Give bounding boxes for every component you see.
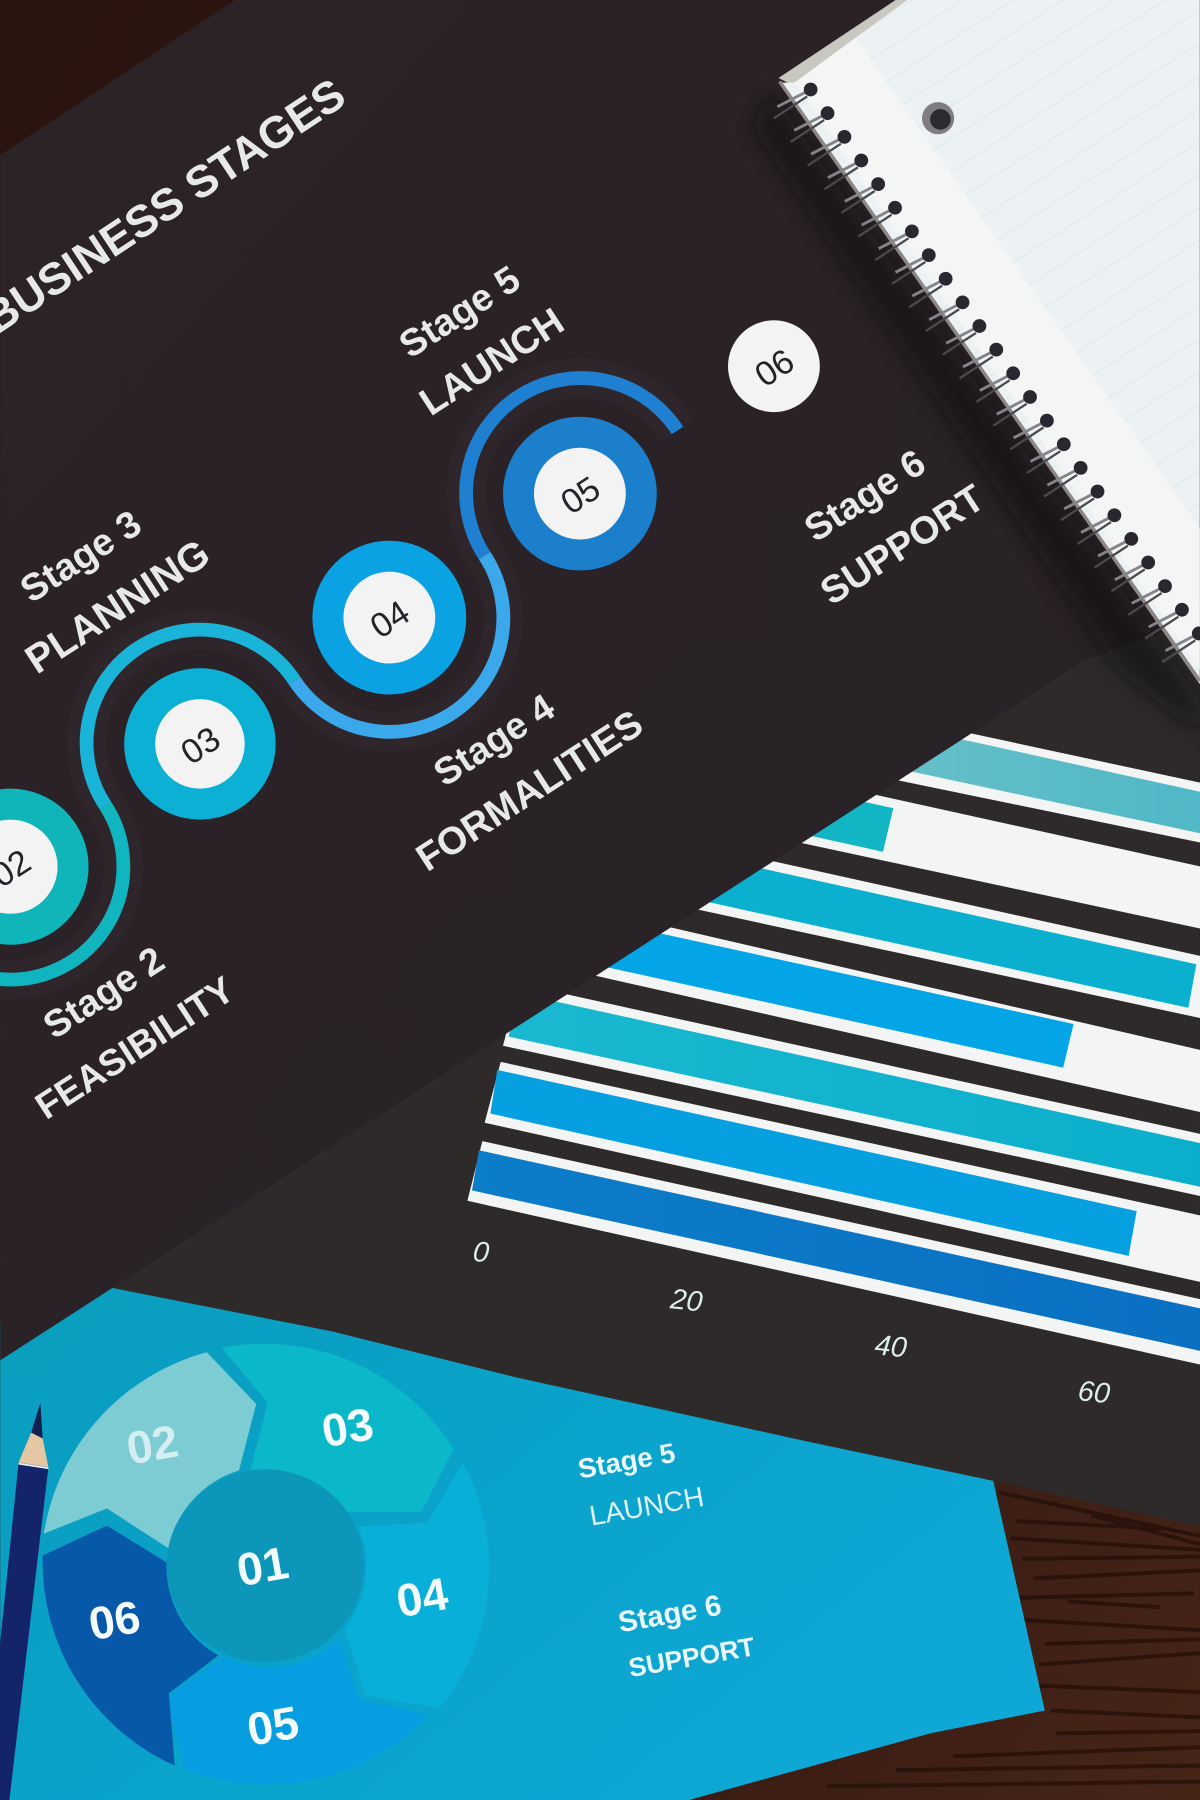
label stage 5 bbox=[392, 258, 572, 424]
axis labels: 60 bbox=[1076, 1375, 1112, 1410]
stage circle 03: 03 bbox=[174, 720, 227, 772]
label stage 5: LAUNCH bbox=[412, 300, 572, 424]
stage 6 label: Stage 6 bbox=[616, 1590, 724, 1639]
label stage 4: Stage 4 bbox=[426, 686, 562, 795]
label stage 3: Stage 3 bbox=[13, 503, 149, 611]
donut numbers: 02 bbox=[123, 1414, 182, 1474]
donut chart bbox=[43, 1344, 489, 1785]
donut numbers: 03 bbox=[318, 1397, 377, 1457]
segment 02 bbox=[44, 1352, 256, 1549]
stage circle 06 bbox=[728, 320, 820, 412]
label stage 3: PLANNING bbox=[17, 531, 218, 683]
timeline path bbox=[0, 378, 677, 980]
bar row 6 bbox=[554, 728, 1200, 932]
bar row 5 bbox=[536, 813, 1200, 1022]
label stage 2: FEASIBILITY bbox=[28, 968, 242, 1127]
bar chart bbox=[467, 647, 1200, 1368]
panel: dark bar chart sheet bbox=[0, 574, 1200, 1527]
segment 04 bbox=[345, 1462, 489, 1708]
panel: black timeline sheet bbox=[0, 0, 1200, 1360]
stage 6 label bbox=[616, 1590, 757, 1683]
stage 5 label: Stage 5 bbox=[576, 1437, 677, 1484]
panel: spiral notebook bbox=[752, 0, 1200, 735]
label stage 5: Stage 5 bbox=[392, 258, 528, 367]
stage circle 02 bbox=[0, 789, 89, 945]
stage 5 label: LAUNCH bbox=[587, 1481, 706, 1532]
segment 01 center bbox=[167, 1469, 364, 1662]
bar row 4 bbox=[519, 897, 1200, 1116]
panel: blue sheet bbox=[0, 1288, 1045, 1800]
donut numbers: 04 bbox=[392, 1567, 452, 1627]
donut numbers bbox=[85, 1397, 452, 1756]
axis labels: 0 bbox=[471, 1236, 491, 1269]
spiral binding bbox=[774, 90, 1199, 662]
stage circle 04 bbox=[312, 541, 466, 695]
axis labels: 40 bbox=[873, 1329, 908, 1364]
stage circle 03 bbox=[124, 668, 276, 820]
stage circle 05 bbox=[503, 417, 657, 571]
label stage 6: Stage 6 bbox=[797, 442, 933, 551]
label stage 4: FORMALITIES bbox=[409, 702, 651, 880]
bar row 2 bbox=[485, 1062, 1200, 1286]
stage 5 label bbox=[576, 1437, 706, 1532]
stage circle 04: 04 bbox=[364, 593, 417, 646]
bar row 1 bbox=[467, 1141, 1200, 1368]
segment 05 bbox=[167, 1639, 428, 1785]
axis labels: 20 bbox=[668, 1283, 704, 1318]
donut numbers: 06 bbox=[85, 1590, 144, 1650]
segment 06 bbox=[43, 1526, 218, 1766]
bar row 7 bbox=[554, 647, 1200, 846]
stage circle 05: 05 bbox=[554, 470, 607, 522]
donut numbers: 05 bbox=[243, 1696, 303, 1756]
label stage 2: Stage 2 bbox=[36, 939, 172, 1048]
segment 03 bbox=[222, 1344, 454, 1512]
donut numbers: 01 bbox=[233, 1536, 292, 1596]
axis labels bbox=[471, 1236, 1112, 1410]
icon: blue pencil bbox=[0, 1403, 48, 1800]
stage 6 label: SUPPORT bbox=[626, 1631, 757, 1683]
stage circle 06: 06 bbox=[748, 342, 801, 395]
punched hole bbox=[922, 102, 954, 134]
label stage 6: SUPPORT bbox=[813, 476, 992, 614]
bar row 3 bbox=[503, 984, 1200, 1200]
